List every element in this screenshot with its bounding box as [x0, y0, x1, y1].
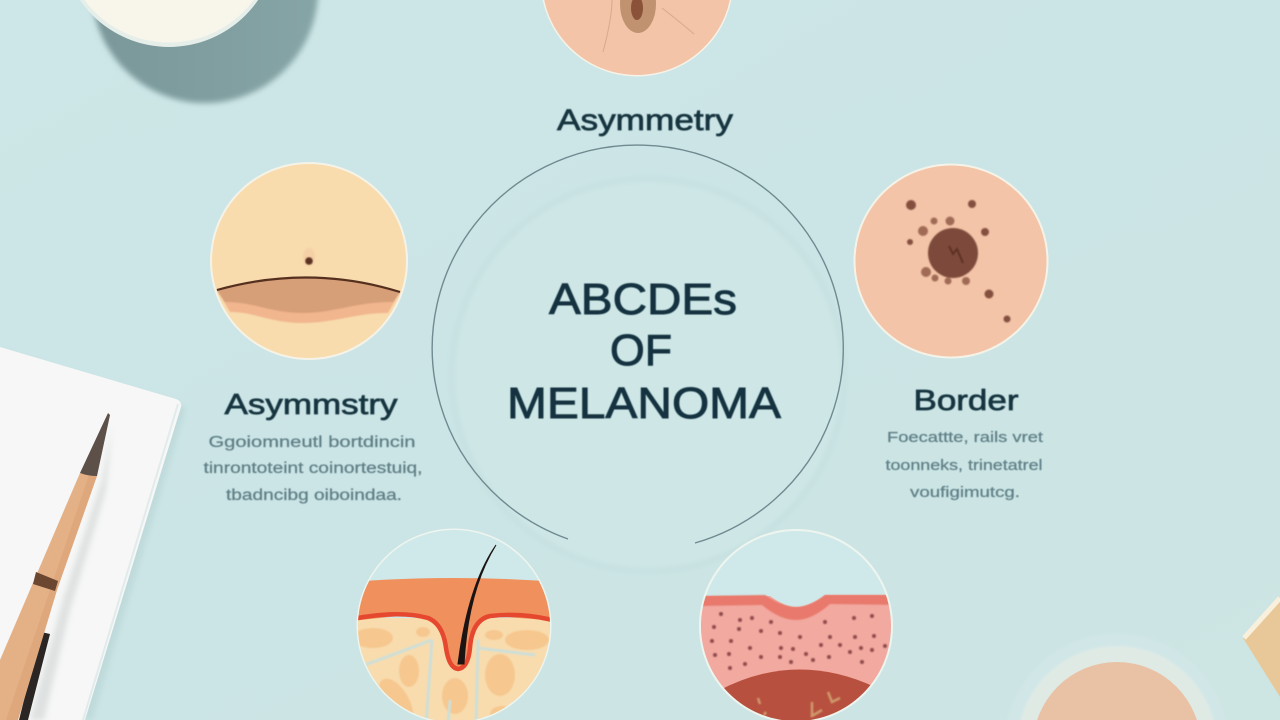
text block: left description: tbadncibg oiboindaa. — [226, 487, 402, 504]
illustration: bottom right dermis circle — [695, 525, 900, 720]
heading: Asymmetry: Asymmetry — [557, 104, 733, 137]
heading: left Asymmstry: Asymmstry — [224, 389, 398, 421]
illustration: left asymmetry circle — [205, 160, 415, 365]
connective lines — [365, 640, 535, 720]
epidermis — [358, 578, 550, 667]
text block: right description: Foecattte, rails vret — [887, 429, 1044, 446]
pigment dots — [712, 614, 885, 668]
text block: left description: Ggoiomneutl bortdincin — [208, 434, 416, 451]
fat lobules — [353, 627, 549, 720]
hair — [458, 545, 496, 664]
title: ABCDEs — [549, 275, 737, 324]
text block: left description — [204, 434, 422, 504]
notepaper and pencil, bottom left — [0, 347, 186, 720]
dish, bottom right — [1005, 634, 1229, 720]
text block: right description: voufigimutcg. — [910, 484, 1020, 501]
text block: right description: toonneks, trinetatrel — [886, 457, 1042, 474]
beige block, right edge — [1243, 597, 1280, 697]
illustration: top skin circle — [542, 0, 732, 76]
mole with satellite dots — [906, 200, 1010, 322]
text block: right description — [886, 429, 1044, 501]
illustration: bottom left hair follicle circle — [350, 525, 560, 720]
text block: left description: tinrontoteint coinortestuiq, — [204, 460, 422, 477]
title: OF — [610, 326, 672, 375]
cup with shadow, top left — [61, 0, 318, 103]
illustration: right border circle — [854, 164, 1048, 358]
title — [507, 275, 782, 428]
heading: Border: Border — [914, 385, 1019, 417]
centre ring — [432, 145, 844, 571]
title: MELANOMA — [507, 379, 782, 428]
